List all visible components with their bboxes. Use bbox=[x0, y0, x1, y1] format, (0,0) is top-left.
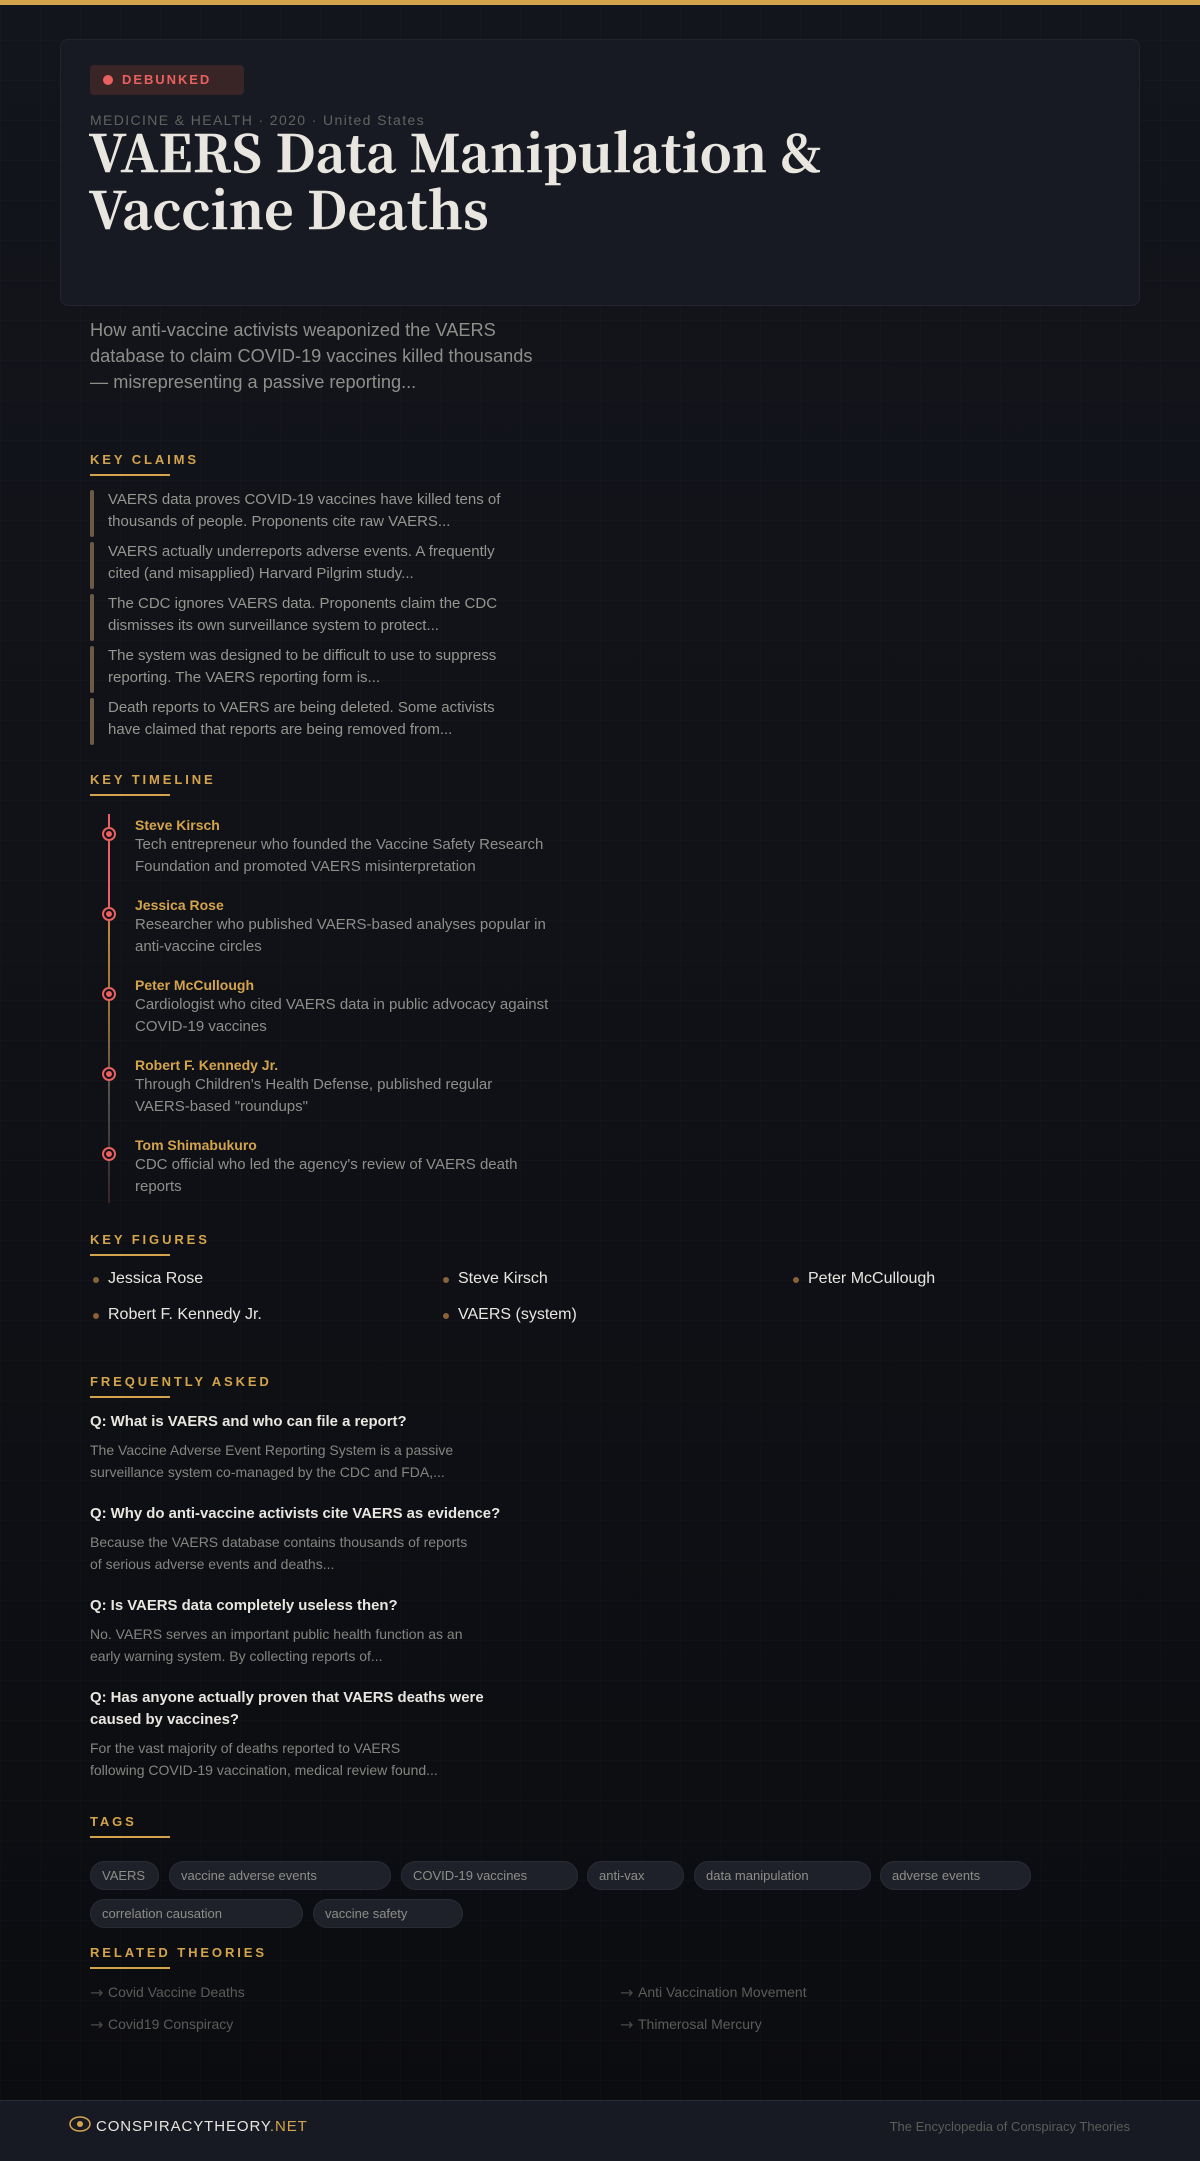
answer 4: following COVID-19 vaccination, medical review found... bbox=[90, 1762, 438, 1778]
badge: debunked bbox=[90, 65, 244, 95]
heading: tags: TAGS bbox=[90, 1814, 137, 1829]
timeline dot 2 bbox=[102, 907, 116, 921]
related link: Thimerosal Mercury bbox=[638, 2016, 762, 2032]
panel: tag pills bbox=[90, 1861, 1031, 1928]
tag bbox=[169, 1861, 391, 1890]
icon: eye logo bbox=[69, 2115, 91, 2133]
badge label: DEBUNKED bbox=[122, 72, 211, 87]
tag bbox=[90, 1899, 303, 1928]
claim 1 bbox=[90, 490, 500, 537]
entry: Peter McCullough: Peter McCullough bbox=[135, 977, 254, 993]
tag: adverse events bbox=[892, 1868, 980, 1883]
answer 3: early warning system. By collecting reports of... bbox=[90, 1648, 383, 1664]
tag: vaccine safety bbox=[325, 1906, 407, 1921]
timeline dot 5 bbox=[102, 1147, 116, 1161]
subtitle: — misrepresenting a passive reporting... bbox=[90, 372, 416, 392]
entry: Tom Shimabukuro: Tom Shimabukuro bbox=[135, 1137, 257, 1153]
answer 1: surveillance system co-managed by the CDC and FDA,... bbox=[90, 1464, 445, 1480]
panel: hero header bbox=[60, 39, 1140, 306]
figure: Peter McCullough: Peter McCullough bbox=[808, 1270, 935, 1287]
title bbox=[89, 113, 822, 244]
related link bbox=[620, 2014, 762, 2034]
entry: Tom Shimabukuro bbox=[135, 1137, 518, 1195]
figure: Robert F. Kennedy Jr.: Robert F. Kennedy Jr. bbox=[108, 1306, 262, 1323]
logo wordmark: CONSPIRACYTHEORY.NET bbox=[96, 2118, 308, 2135]
tag bbox=[90, 1861, 159, 1890]
tag: correlation causation bbox=[102, 1906, 222, 1921]
claim 5: Death reports to VAERS are being deleted. Some activists bbox=[108, 699, 495, 716]
heading: key timeline: KEY TIMELINE bbox=[90, 772, 216, 787]
answer 3 bbox=[90, 1626, 462, 1664]
related link: Covid19 Conspiracy bbox=[108, 2016, 233, 2032]
entry: Jessica Rose: Researcher who published VAERS-based analyses popular in bbox=[135, 916, 546, 933]
answer 2: Because the VAERS database contains thousands of reports bbox=[90, 1534, 467, 1550]
tag: VAERS bbox=[102, 1868, 145, 1883]
tag: COVID-19 vaccines bbox=[413, 1868, 527, 1883]
question 4 bbox=[90, 1690, 484, 1728]
heading: related theories: RELATED THEORIES bbox=[90, 1945, 267, 1960]
answer 1: The Vaccine Adverse Event Reporting System is a passive bbox=[90, 1442, 453, 1458]
question 2: Q: Why do anti-vaccine activists cite VAERS as evidence? bbox=[90, 1506, 500, 1522]
entry: Peter McCullough: COVID-19 vaccines bbox=[135, 1018, 267, 1035]
tag: vaccine adverse events bbox=[181, 1868, 317, 1883]
tag bbox=[587, 1861, 684, 1890]
timeline line bbox=[108, 814, 110, 1203]
entry: Peter McCullough: Cardiologist who cited VAERS data in public advocacy against bbox=[135, 996, 548, 1013]
tag: data manipulation bbox=[706, 1868, 809, 1883]
entry: Tom Shimabukuro: CDC official who led the agency's review of VAERS death bbox=[135, 1156, 518, 1173]
entry: Peter McCullough bbox=[135, 977, 548, 1035]
figure: VAERS (system): VAERS (system) bbox=[458, 1306, 577, 1323]
claim 5 bbox=[90, 698, 495, 745]
answer 2 bbox=[90, 1534, 467, 1572]
entry: Steve Kirsch bbox=[135, 817, 543, 875]
panel: key claims list bbox=[90, 490, 500, 745]
entry: Jessica Rose bbox=[135, 897, 546, 955]
related link: → bbox=[620, 2015, 633, 2034]
related link: → bbox=[90, 2015, 103, 2034]
claim 4: reporting. The VAERS reporting form is... bbox=[108, 669, 380, 686]
tag bbox=[313, 1899, 463, 1928]
subtitle: database to claim COVID-19 vaccines killed thousands bbox=[90, 346, 532, 366]
answer 4: For the vast majority of deaths reported to VAERS bbox=[90, 1740, 400, 1756]
question 1: Q: What is VAERS and who can file a report? bbox=[90, 1414, 407, 1430]
related link: → bbox=[90, 1983, 103, 2002]
claim 3 bbox=[90, 594, 497, 641]
related link: Covid Vaccine Deaths bbox=[108, 1984, 245, 2000]
title: VAERS Data Manipulation & bbox=[89, 113, 822, 187]
question 4: caused by vaccines? bbox=[90, 1712, 239, 1728]
entry: Robert F. Kennedy Jr. bbox=[135, 1057, 492, 1115]
timeline dot 3 bbox=[102, 987, 116, 1001]
entry: Steve Kirsch: Tech entrepreneur who founded the Vaccine Safety Research bbox=[135, 836, 543, 853]
timeline dot 4 bbox=[102, 1067, 116, 1081]
subtitle bbox=[90, 320, 532, 392]
figure: Jessica Rose: Jessica Rose bbox=[108, 1270, 203, 1287]
claim 3: dismisses its own surveillance system to protect... bbox=[108, 617, 439, 634]
title: Vaccine Deaths bbox=[89, 170, 489, 244]
claim 3: The CDC ignores VAERS data. Proponents claim the CDC bbox=[108, 595, 497, 612]
entry: Robert F. Kennedy Jr.: Robert F. Kennedy Jr. bbox=[135, 1057, 278, 1073]
icon: status dot bbox=[103, 75, 113, 85]
related link: Anti Vaccination Movement bbox=[638, 1984, 807, 2000]
claim 1: thousands of people. Proponents cite raw VAERS... bbox=[108, 513, 450, 530]
claim 5: have claimed that reports are being removed from... bbox=[108, 721, 452, 738]
panel: key figures grid bbox=[93, 1270, 935, 1323]
claim 2: cited (and misapplied) Harvard Pilgrim study... bbox=[108, 565, 414, 582]
top accent bar bbox=[0, 0, 1200, 5]
entry: Steve Kirsch: Steve Kirsch bbox=[135, 817, 220, 833]
heading: key figures: KEY FIGURES bbox=[90, 1232, 210, 1247]
tag bbox=[880, 1861, 1031, 1890]
heading: frequently asked: FREQUENTLY ASKED bbox=[90, 1374, 272, 1389]
answer 2: of serious adverse events and deaths... bbox=[90, 1556, 334, 1572]
category meta line: MEDICINE & HEALTH · 2020 · United States bbox=[90, 112, 425, 128]
tag: anti-vax bbox=[599, 1868, 645, 1883]
timeline dot 1 bbox=[102, 827, 116, 841]
entry: Robert F. Kennedy Jr.: Through Children's Health Defense, published regular bbox=[135, 1076, 492, 1093]
entry: Tom Shimabukuro: reports bbox=[135, 1178, 182, 1195]
tag bbox=[694, 1861, 871, 1890]
footer tagline: The Encyclopedia of Conspiracy Theories bbox=[890, 2119, 1130, 2134]
answer 3: No. VAERS serves an important public health function as an bbox=[90, 1626, 462, 1642]
entry: Robert F. Kennedy Jr.: VAERS-based "roundups" bbox=[135, 1098, 308, 1115]
entry: Jessica Rose: Jessica Rose bbox=[135, 897, 224, 913]
question 4: Q: Has anyone actually proven that VAERS deaths were bbox=[90, 1690, 484, 1706]
answer 4 bbox=[90, 1740, 438, 1778]
entry: Jessica Rose: anti-vaccine circles bbox=[135, 938, 262, 955]
subtitle: How anti-vaccine activists weaponized the VAERS bbox=[90, 320, 496, 340]
timeline bbox=[102, 814, 548, 1203]
claim 2 bbox=[90, 542, 495, 589]
answer 1 bbox=[90, 1442, 453, 1480]
question 3: Q: Is VAERS data completely useless then? bbox=[90, 1598, 398, 1614]
entry: Steve Kirsch: Foundation and promoted VAERS misinterpretation bbox=[135, 858, 476, 875]
footer bbox=[0, 2100, 1200, 2161]
claim 4 bbox=[90, 646, 496, 693]
heading: key claims: KEY CLAIMS bbox=[90, 452, 199, 467]
related link: → bbox=[620, 1983, 633, 2002]
claim 1: VAERS data proves COVID-19 vaccines have killed tens of bbox=[108, 491, 500, 508]
figure: Steve Kirsch: Steve Kirsch bbox=[458, 1270, 548, 1287]
claim 2: VAERS actually underreports adverse events. A frequently bbox=[108, 543, 495, 560]
claim 4: The system was designed to be difficult to use to suppress bbox=[108, 647, 496, 664]
tag bbox=[401, 1861, 578, 1890]
